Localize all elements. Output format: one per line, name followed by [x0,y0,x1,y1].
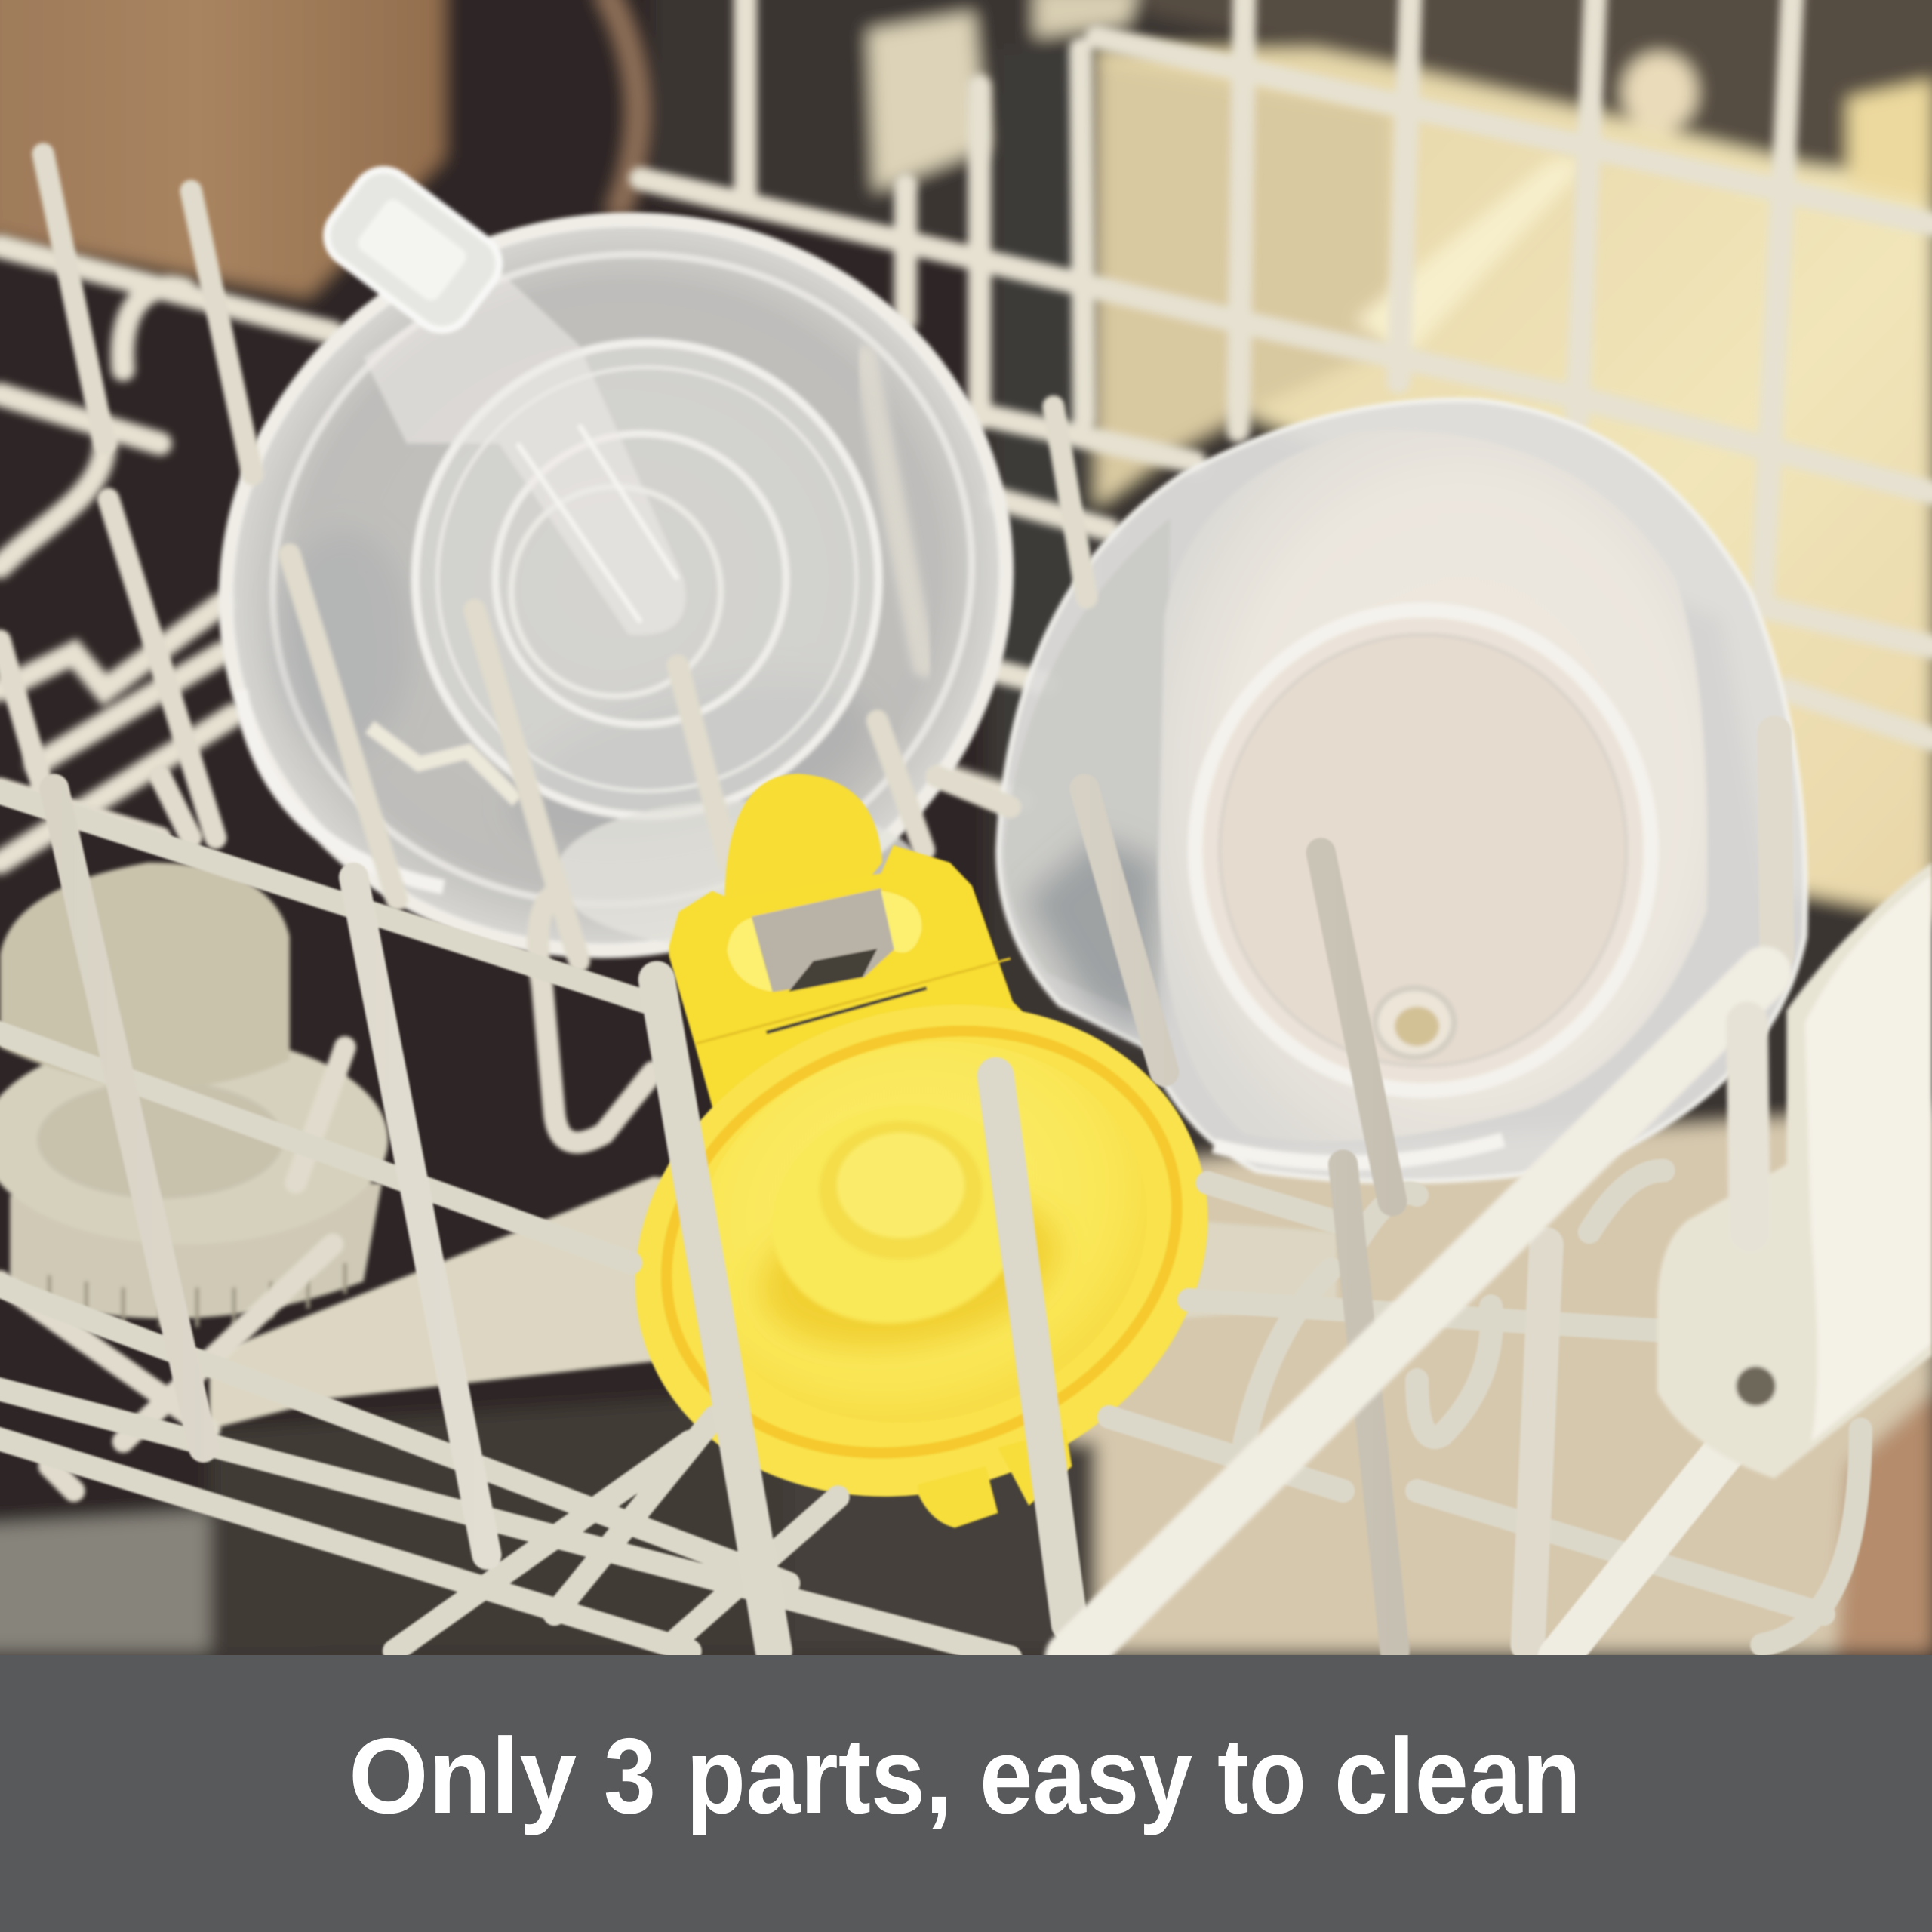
title: Only [349,1716,577,1836]
back rack wires [0,0,1932,863]
membrane tab [724,774,882,918]
part: clear cup [998,400,1806,1182]
membrane disc [565,926,1278,1575]
part: large clear flange [143,133,1088,1038]
front rack wires and tines [0,733,1860,1657]
title: clean [1334,1716,1581,1836]
part: yellow membrane [565,774,1278,1575]
title: 3 [604,1716,656,1836]
title: to [1217,1716,1306,1836]
spray arm and hub [0,863,1337,1429]
title: parts, [686,1716,952,1836]
caption band [0,1655,1932,1932]
mid rack wires and tines [0,154,1087,1491]
title [349,1716,1581,1836]
title: easy [980,1716,1192,1836]
rack handle [1657,863,1932,1478]
